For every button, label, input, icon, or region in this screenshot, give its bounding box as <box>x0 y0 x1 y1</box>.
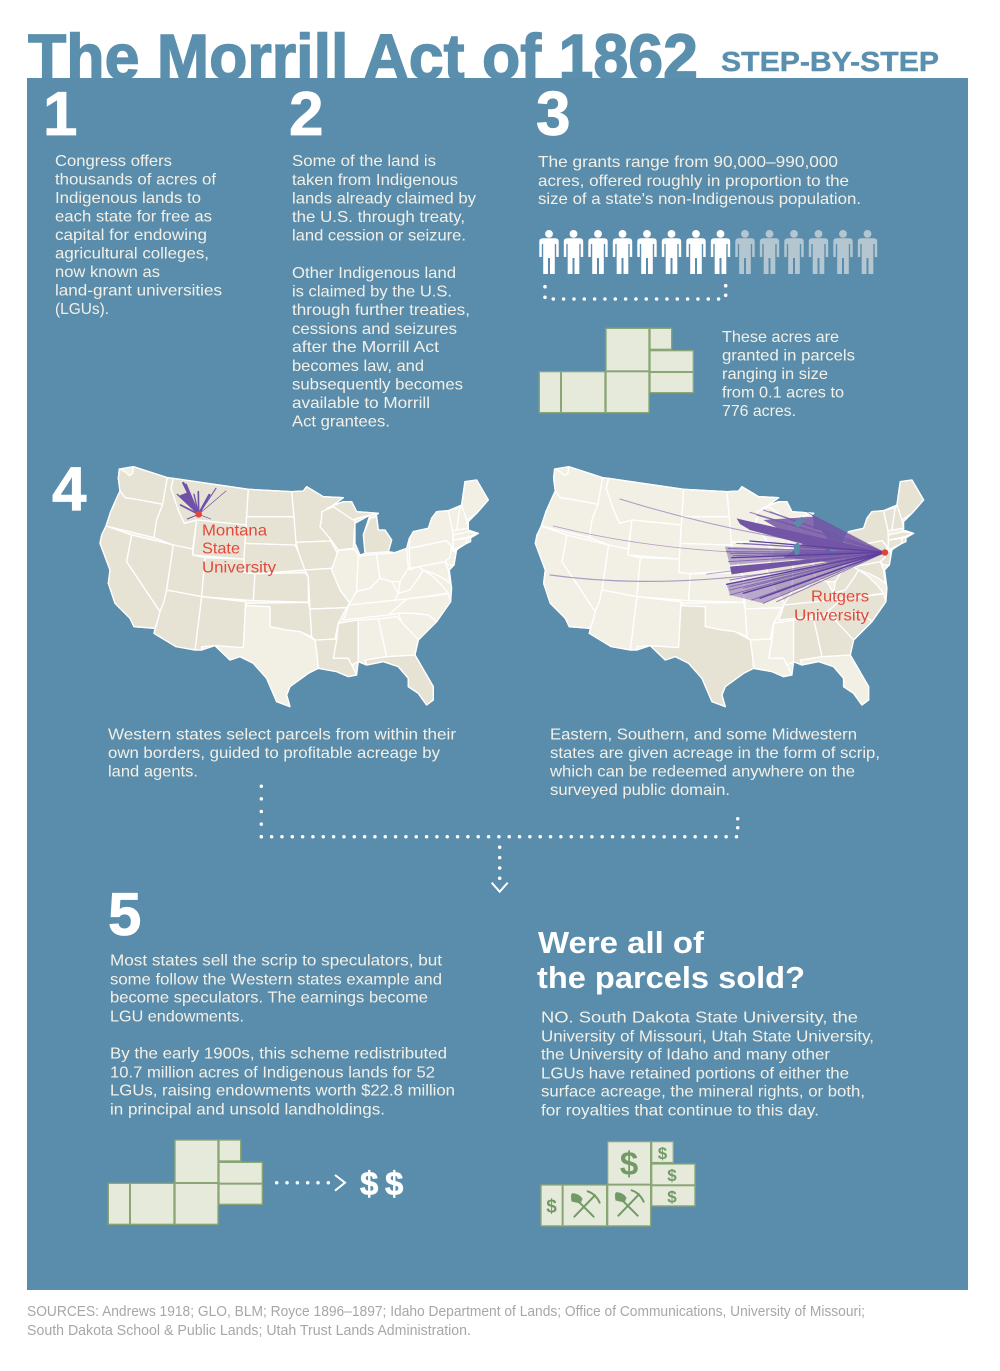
step 3 text: The grants range from 90,000–990,000 <box>538 154 838 171</box>
retained parcels text: NO. South Dakota State University, the <box>541 1010 858 1026</box>
eastern states caption: states are given acreage in the form of scrip, <box>550 745 880 762</box>
step 5 text: some follow the Western states example and <box>110 972 442 988</box>
step 5 text: in principal and unsold landholdings. <box>110 1102 385 1118</box>
eastern states caption <box>549 726 880 799</box>
step 2 text: lands already claimed by <box>292 190 476 208</box>
step 5 text: LGU endowments. <box>110 1008 244 1026</box>
sources <box>27 1304 865 1339</box>
heading: were all of the parcels sold <box>537 925 805 995</box>
eastern states caption: which can be redeemed anywhere on the <box>549 764 855 780</box>
step 1 number: 1 <box>43 80 77 149</box>
step 3 text <box>538 154 861 208</box>
heading: were all of the parcels sold: Were all of <box>538 925 705 960</box>
icon: retained parcels with dollars and tools: $ <box>658 1144 668 1163</box>
step 1 text <box>55 153 222 318</box>
icon row: people <box>539 230 877 274</box>
step 2 text <box>292 153 476 430</box>
icon: parcels become money: $ <box>385 1165 403 1202</box>
retained parcels text: for royalties that continue to this day. <box>541 1102 819 1120</box>
step 2 text: subsequently becomes <box>292 376 463 394</box>
step 3 text: size of a state's non-Indigenous population. <box>538 191 861 208</box>
parcel lines from Montana State <box>177 483 226 519</box>
step 1 text: (LGUs). <box>55 301 109 318</box>
step 1 text: Congress offers <box>55 153 172 170</box>
step 2 text: taken from Indigenous <box>292 172 458 189</box>
step 1 text: capital for endowing <box>55 227 207 244</box>
eastern states caption: surveyed public domain. <box>550 782 730 799</box>
icon: retained parcels with dollars and tools: $ <box>546 1196 557 1218</box>
step 2 text: Other Indigenous land <box>292 265 456 282</box>
label: Montana State University <box>202 522 276 576</box>
step 1 text: land-grant universities <box>55 282 222 300</box>
campus marker: Rutgers <box>882 549 888 556</box>
retained parcels text <box>541 1010 874 1120</box>
icon: retained parcels with dollars and tools <box>541 1142 695 1226</box>
step 2 text: land cession or seizure. <box>292 228 466 244</box>
step 5 number: 5 <box>108 881 141 948</box>
step 4 number: 4 <box>52 455 87 524</box>
label: Rutgers University <box>794 588 869 624</box>
subtitle: step-by-step: STEP-BY-STEP <box>721 46 939 77</box>
retained parcels text: University of Missouri, Utah State University, <box>541 1028 874 1046</box>
parcel lines from Rutgers <box>550 499 885 603</box>
step 2 number: 2 <box>289 80 323 149</box>
step 1 text: each state for free as <box>55 208 212 226</box>
step 5 text: Most states sell the scrip to speculators, but <box>110 952 443 970</box>
heading: were all of the parcels sold: the parcels sold? <box>537 960 805 995</box>
parcels text <box>722 329 855 420</box>
label: Montana State University: University <box>202 560 276 576</box>
icon: retained parcels with dollars and tools: $ <box>620 1145 638 1182</box>
step 5 text: By the early 1900s, this scheme redistributed <box>110 1046 447 1062</box>
dotted bracket under people <box>543 284 728 299</box>
campus marker: Montana <box>196 511 202 518</box>
step 2 text: Some of the land is <box>292 153 436 170</box>
sources: South Dakota School & Public Lands; Utah Trust Lands Administration. <box>27 1323 471 1339</box>
title: The Morrill Act of 1862 <box>28 21 698 93</box>
label: Rutgers University: Rutgers <box>811 588 869 606</box>
parcels text: granted in parcels <box>722 348 855 364</box>
parcels text: from 0.1 acres to <box>722 384 844 402</box>
western states caption: own borders, guided to profitable acreage by <box>108 745 440 762</box>
parcels text: ranging in size <box>722 366 828 383</box>
western states caption: Western states select parcels from within their <box>108 726 457 744</box>
map: Montana State University <box>100 467 488 707</box>
step 2 text: Act grantees. <box>292 414 390 430</box>
retained parcels text: LGUs have retained portions of either the <box>541 1066 849 1082</box>
step 2 text: through further treaties, <box>292 302 470 319</box>
icon: land parcels <box>539 328 693 413</box>
step 2 text: is claimed by the U.S. <box>292 284 452 300</box>
western states caption <box>108 726 457 780</box>
parcels text: These acres are <box>722 329 839 346</box>
western states caption: land agents. <box>108 764 198 780</box>
icon: parcels become money: $ <box>360 1165 378 1202</box>
lake showing through the lines <box>793 517 836 555</box>
label: Rutgers University: University <box>794 608 869 624</box>
parcels text: 776 acres. <box>722 403 796 420</box>
step 2 text: available to Morrill <box>292 395 430 412</box>
arrow: dotted connector to step 5 <box>261 786 738 892</box>
step 2 text: after the Morrill Act <box>292 339 440 356</box>
step 5 text: become speculators. The earnings become <box>110 990 428 1006</box>
step 2 text: the U.S. through treaty, <box>292 209 465 226</box>
label: Montana State University: State <box>202 540 240 558</box>
map: Rutgers University <box>535 467 924 707</box>
step 3 text: acres, offered roughly in proportion to the <box>538 173 849 190</box>
eastern states caption: Eastern, Southern, and some Midwestern <box>550 726 857 744</box>
step 3 number: 3 <box>536 80 570 149</box>
sources: SOURCES: Andrews 1918; GLO, BLM; Royce 1896–1897; Idaho Department of Lands; Office of Communications, University of Missouri; <box>27 1304 865 1320</box>
step 5 text: 10.7 million acres of Indigenous lands for 52 <box>110 1064 435 1082</box>
step 1 text: thousands of acres of <box>55 172 217 188</box>
step 2 <box>289 80 476 430</box>
icon: parcels become money <box>108 1140 403 1224</box>
step 1 text: agricultural colleges, <box>55 246 209 262</box>
icon: retained parcels with dollars and tools: $ <box>667 1188 677 1206</box>
step 5 text <box>110 952 455 1118</box>
step 1 text: now known as <box>55 264 160 281</box>
label: Montana State University: Montana <box>202 522 267 540</box>
icon: retained parcels with dollars and tools: $ <box>667 1166 677 1185</box>
step 5 <box>108 881 455 1224</box>
step 2 text: becomes law, and <box>292 358 424 375</box>
step 3 <box>536 80 877 420</box>
retained parcels text: surface acreage, the mineral rights, or both, <box>541 1084 865 1100</box>
retained parcels text: the University of Idaho and many other <box>541 1046 831 1064</box>
step 5 text: LGUs, raising endowments worth $22.8 million <box>110 1082 455 1100</box>
step 2 text: cessions and seizures <box>292 321 457 338</box>
step 1 <box>43 80 222 318</box>
step 1 text: Indigenous lands to <box>55 190 201 207</box>
